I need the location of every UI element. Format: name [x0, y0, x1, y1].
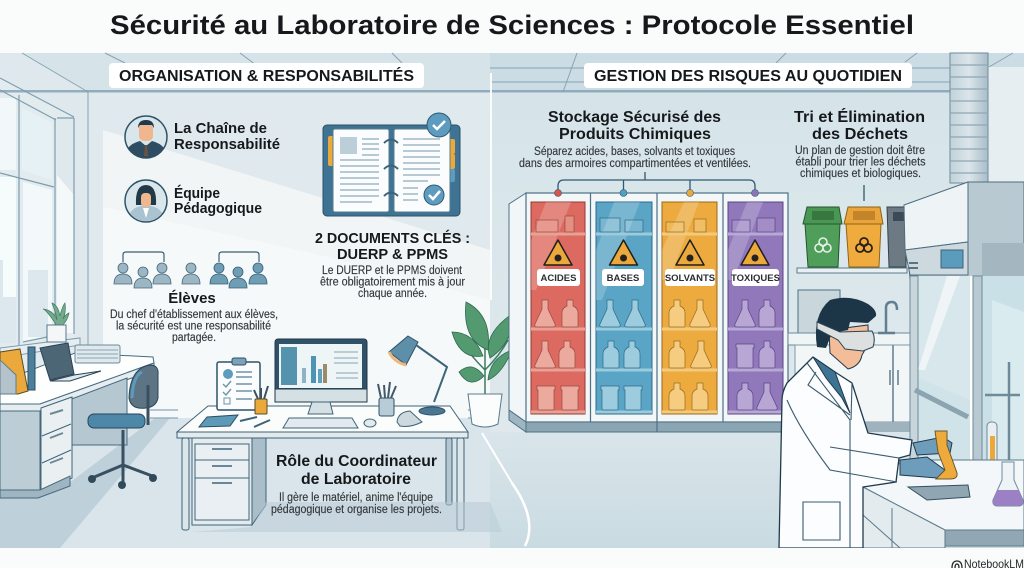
text block: rôle du coordinateur: de Laboratoire — [301, 471, 411, 488]
retort stand and test tube — [985, 362, 1020, 466]
text block: documents clés: chaque année. — [358, 288, 427, 300]
label toxiques: TOXIQUES — [731, 273, 780, 284]
label acides: ACIDES — [541, 273, 576, 284]
connector to cabinets — [554, 172, 758, 196]
cabinet: bases — [596, 202, 652, 414]
office chair — [88, 365, 158, 489]
label bases — [602, 269, 644, 286]
floor right — [490, 432, 1024, 548]
clipboard and pens — [217, 358, 268, 414]
flask held — [935, 431, 957, 479]
footer band — [0, 548, 1024, 568]
text block: élèves — [110, 290, 278, 344]
label acides — [537, 269, 580, 286]
desk legs — [182, 438, 464, 530]
monitor — [275, 339, 367, 414]
purple flask — [993, 462, 1023, 506]
window — [0, 78, 80, 358]
label: la chaîne de responsabilité: La Chaîne de — [174, 120, 267, 137]
text block: stockage sécurisé: Stockage Sécurisé des — [548, 109, 721, 126]
lab coat — [779, 357, 912, 548]
text block: élèves: Élèves — [168, 290, 216, 307]
label: la chaîne de responsabilité — [174, 120, 280, 153]
text block: tri et élimination — [794, 107, 926, 180]
label: équipe pédagogique — [174, 185, 262, 217]
paper stack — [75, 345, 120, 363]
text block: tri et élimination: chimiques et biologiques. — [800, 168, 921, 180]
icon: groupe d'élèves — [114, 252, 267, 288]
head — [829, 325, 868, 369]
text block: stockage sécurisé — [519, 109, 751, 170]
text block: documents clés: Le DUERP et le PPMS doivent — [322, 265, 463, 277]
text block: stockage sécurisé: Séparez acides, bases, solvants et toxiques — [534, 146, 735, 158]
cabinet: acides — [531, 202, 585, 414]
text block: documents clés — [315, 230, 470, 300]
cabinet: solvants — [662, 202, 717, 414]
text block: stockage sécurisé: Produits Chimiques — [559, 126, 711, 143]
hazard sign — [741, 240, 769, 265]
large plant — [452, 302, 512, 427]
text block: rôle du coordinateur — [271, 453, 442, 516]
gloves — [913, 437, 952, 455]
safety cabinet frame — [509, 193, 788, 432]
desk lamp and pencil cup — [378, 336, 447, 416]
icon: équipe avatar — [125, 180, 167, 222]
text block: élèves: la sécurité est une responsabilité — [116, 320, 271, 332]
green bin — [803, 207, 842, 267]
shirt and tie — [813, 357, 850, 413]
fume hood — [904, 182, 1024, 516]
bench — [863, 460, 1024, 548]
small plant on sill — [43, 303, 69, 342]
heading pill: gestion — [584, 63, 912, 88]
goggles — [817, 322, 874, 351]
text block: documents clés: être obligatoirement mis à jour — [320, 276, 465, 288]
text block: tri et élimination: établi pour trier les déchets — [796, 156, 926, 168]
label bases: BASES — [607, 273, 639, 284]
text block: élèves: Du chef d'établissement aux élèves, — [110, 309, 278, 321]
scientist — [779, 298, 957, 548]
label: équipe pédagogique: Pédagogique — [174, 200, 262, 217]
hair — [816, 298, 876, 348]
central desk — [177, 406, 502, 532]
text block: documents clés: 2 DOCUMENTS CLÉS : — [315, 230, 470, 247]
label solvants — [665, 269, 715, 286]
floor left — [0, 418, 490, 548]
heading pill: organisation: ORGANISATION & RESPONSABILITÉS — [119, 66, 414, 85]
label: équipe pédagogique: Équipe — [174, 185, 220, 202]
icon: classeur ouvert — [323, 113, 460, 216]
desk objects: tablet, keyboard, mouse — [199, 411, 422, 428]
label: la chaîne de responsabilité: Responsabilité — [174, 136, 280, 153]
text block: stockage sécurisé: dans des armoires compartimentées et ventilées. — [519, 158, 751, 170]
title: Sécurité au Laboratoire de Sciences : Protocole Essentiel — [110, 10, 914, 40]
cabinet: toxiques — [728, 202, 783, 414]
label solvants: SOLVANTS — [665, 273, 715, 284]
left desk with binders and laptop — [0, 343, 154, 498]
bins line — [863, 185, 865, 201]
yellow bin — [844, 207, 883, 267]
icon: responsable avatar — [125, 116, 167, 158]
laptop — [40, 343, 101, 381]
binders — [0, 347, 35, 394]
grey bin — [887, 207, 906, 267]
background lab counter and sink — [788, 290, 910, 432]
text block: tri et élimination: Un plan de gestion doit être — [795, 145, 925, 157]
coat folds and pocket — [787, 363, 899, 548]
hazard sign — [544, 240, 572, 265]
heading pill: gestion: GESTION DES RISQUES AU QUOTIDIEN — [594, 68, 902, 85]
drawers — [0, 397, 72, 498]
text block: tri et élimination: des Déchets — [812, 126, 908, 143]
text block: élèves: partagée. — [172, 332, 216, 344]
extraction duct — [950, 53, 1024, 183]
label toxiques — [731, 269, 780, 286]
hazard sign — [676, 240, 704, 265]
text block: documents clés: DUERP & PPMS — [337, 246, 448, 263]
text block: tri et élimination: Tri et Élimination — [794, 107, 925, 126]
text block: rôle du coordinateur: Il gère le matériel, anime l'équipe — [279, 492, 433, 504]
text block: rôle du coordinateur: Rôle du Coordinateur — [276, 453, 437, 470]
heading pill: organisation — [109, 63, 424, 88]
drawer unit — [192, 438, 266, 525]
text block: rôle du coordinateur: pédagogique et organise les projets. — [271, 504, 442, 516]
waste bins on shelf — [797, 207, 907, 273]
hazard sign — [610, 240, 638, 265]
